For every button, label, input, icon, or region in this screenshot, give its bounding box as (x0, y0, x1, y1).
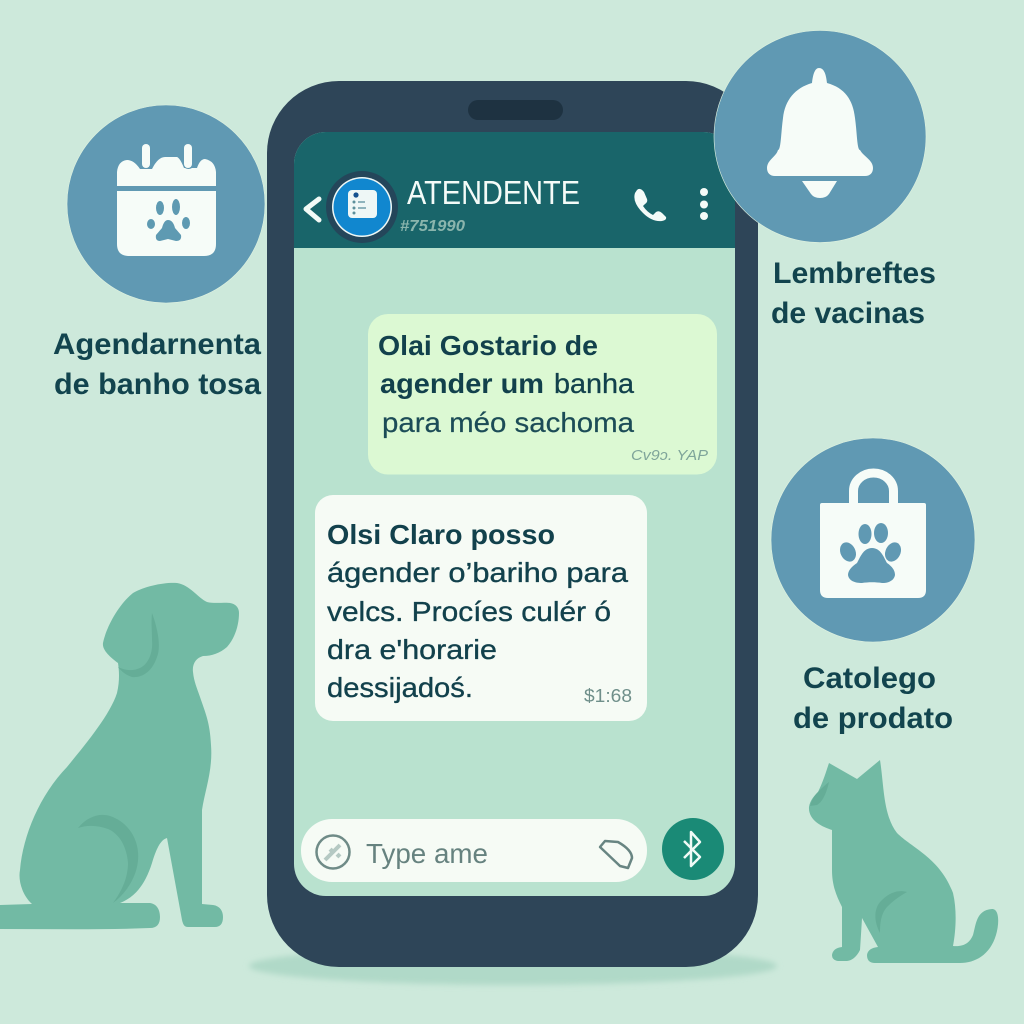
bag label: de prodato (793, 702, 953, 735)
speaker (468, 100, 563, 120)
agent message bubble: dra e'horarie (327, 634, 497, 665)
user message bubble: banha (554, 368, 634, 399)
bell circle (714, 30, 926, 242)
user message bubble (368, 314, 717, 474)
bell label: de vacinas (771, 297, 925, 330)
catalogue feature (771, 438, 975, 735)
input field: Type ame (366, 838, 488, 869)
icon: calendar (117, 143, 216, 256)
input field (301, 819, 647, 882)
chat header (294, 132, 735, 248)
icon: bell (767, 68, 873, 176)
agent message bubble: ágender o’bariho para (327, 557, 628, 588)
phone (267, 81, 758, 967)
agent message bubble: Olsi Claro posso (327, 519, 555, 550)
avatar (326, 171, 398, 243)
screen (294, 132, 735, 896)
calendar label: de banho tosa (54, 368, 261, 401)
cat silhouette (809, 760, 998, 963)
agent message bubble: velcs. Procíes culér ó (327, 596, 611, 627)
calendar label: Agendarnenta (53, 328, 261, 361)
phone shadow (249, 947, 777, 985)
contact name: ATENDENTE (407, 174, 580, 211)
dog ear shading (118, 613, 159, 677)
agent message bubble: $1:68 (584, 686, 632, 706)
menu dots (700, 188, 708, 220)
back arrow (306, 199, 319, 220)
user message bubble: para méo sachoma (382, 407, 634, 438)
icon: shopping bag (820, 473, 926, 598)
vaccine reminder feature (714, 30, 936, 330)
dog silhouette (0, 583, 239, 929)
calendar feature (53, 105, 265, 401)
phone icon (634, 189, 666, 221)
bell label: Lembreftes (773, 257, 936, 290)
send button (662, 818, 724, 880)
contact number: #751990 (400, 218, 465, 235)
bag label: Catolego (803, 662, 936, 695)
agent message bubble: dessijadoś. (327, 672, 473, 703)
cat face shading (810, 782, 829, 806)
cat hip shading (875, 891, 907, 933)
user message bubble: Cv9ɔ. YAP (631, 447, 708, 464)
dog hip shading (78, 815, 138, 903)
user message bubble: Olai Gostario de (378, 330, 598, 361)
agent message bubble (315, 495, 647, 721)
bag circle (771, 438, 975, 642)
calendar circle (67, 105, 265, 303)
user message bubble: agender um (380, 368, 544, 399)
